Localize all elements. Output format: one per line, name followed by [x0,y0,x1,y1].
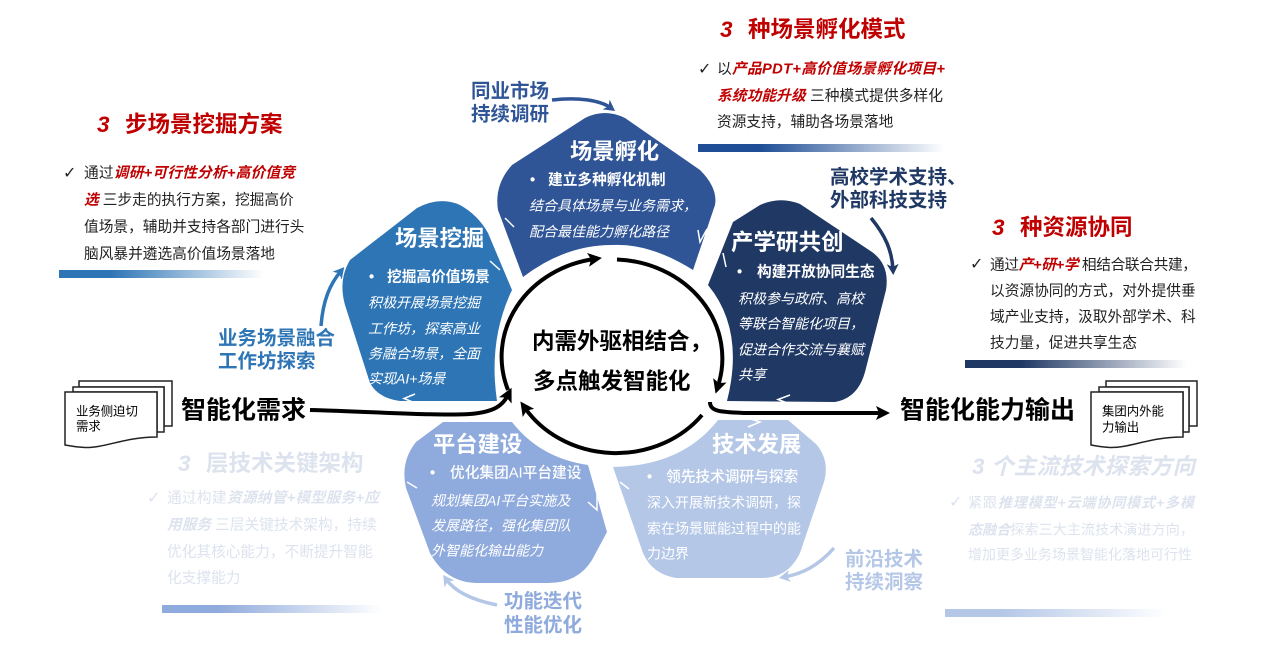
gradient bar [945,609,1167,617]
pentagon text: • [647,470,652,486]
pentagon title: 场景孵化 [570,139,659,164]
pentagon text: 实现AI+场景 [368,370,446,386]
pentagon text: 索在场景赋能过程中的能 [647,520,801,536]
pentagon text: • [530,172,535,188]
text block: incubation modes: 资源支持，辅助各场景落地 [717,114,894,130]
pentagon text: • [430,466,435,482]
pentagon text: • [369,270,374,286]
gradient bar [965,360,1187,368]
callout: 业务场景融合: 业务场景融合 [218,328,336,350]
heading: 3 种资源协同: 种资源协同 [1020,215,1133,240]
pentagon: 技术发展 [613,420,826,578]
heading: 3 种场景孵化模式: 3 [720,17,733,42]
icon: document stack right [1091,381,1197,448]
text block: 用服务 三层关键技术架构，持续 [167,516,377,534]
text block: mining plan: 脑风暴并遴选高价值场景落地 [84,246,275,262]
text block: 化支撑能力 [167,570,240,586]
text block: 态融合探索三大主流技术演进方向， [968,522,1194,538]
arrow [784,548,834,577]
callout: 功能迭代: 性能优化 [504,614,582,636]
text block: mining plan: 选 三步走的执行方案，挖掘高价 [84,190,294,208]
text block: 紧跟推理模型+云端协同模式+多模 [968,494,1197,510]
arrow [552,99,611,108]
text block: 增加更多业务场景智能化落地可行性 [968,546,1192,562]
pentagon text: 工作坊，探索高业 [368,320,481,336]
text block: resource synergy: 以资源协同的方式，对外提供垂 [990,282,1196,300]
pentagon text: 促进合作交流与襄赋 [738,342,866,358]
pentagon text: 结合具体场景与业务需求， [529,198,697,214]
label: 智能化能力输出: 智能化能力输出 [900,396,1075,424]
pentagon text [529,170,697,240]
callout: 同业市场持续调研 [471,80,611,126]
text block: incubation modes [717,60,945,130]
pentagon title: 平台建设 [433,431,522,457]
gradient bar [59,270,264,278]
text block: resource synergy: 技力量，促进共享生态 [990,334,1137,352]
callout: 高校学术支持: 高校学术支持、 [830,166,967,188]
pentagon text: 发展路径，强化集团队 [431,518,571,534]
panel: 3 种场景孵化模式 [698,17,945,152]
panel: 3 层技术关键架构 (faded) [147,451,382,613]
heading: 3 步场景挖掘方案: 3 [97,112,110,137]
pentagon text: 构建开放协同生态 [757,262,875,280]
heading: 3 种场景孵化模式: 种场景孵化模式 [748,17,906,42]
center text [532,329,712,394]
text block: 通过构建资源纳管+模型服务+应 [167,490,381,506]
text block: mining plan: 值场景，辅助并支持各部门进行头 [84,218,304,236]
text block [968,494,1197,562]
pentagon text: 规划集团AI平台实施及 [431,492,571,508]
document text [1102,404,1164,434]
callout: 高校学术支持 [830,166,967,270]
pentagon text [647,468,801,562]
callout: 业务场景融合: 工作坊探索 [218,350,316,372]
icon: check: ✓ [147,488,160,507]
callout: 前沿技术 [784,548,924,594]
pentagon text: 外智能化输出能力 [431,542,544,558]
callout: 同业市场持续调研: 持续调研 [471,104,549,126]
pentagon text: 等联合智能化项目， [738,316,864,332]
callout: 前沿技术: 前沿技术 [845,548,924,570]
icon: check: ✓ [970,254,983,273]
small white chevrons on pentagon edges [404,218,790,510]
arrow [871,218,893,270]
pentagon text [430,464,582,558]
heading: 3 步场景挖掘方案: 步场景挖掘方案 [125,111,283,137]
pentagon text: 积极参与政府、高校 [738,290,866,306]
document text: 力输出 [1102,420,1139,434]
arrow [446,579,497,605]
icon: check: ✓ [949,492,962,511]
pentagon title: 技术发展 [712,432,801,457]
icon: check: ✓ [698,59,711,78]
text block: resource synergy: 通过产+研+学 相结合联合共建， [990,256,1197,274]
pentagon: 平台建设 [404,422,607,583]
text block: resource synergy [990,256,1197,352]
arrow [321,271,341,326]
input arrow: 智能化需求 [310,395,508,415]
center text: 内需外驱相结合， [532,329,712,354]
pentagon text [368,268,490,386]
text block: resource synergy: 域产业支持，汲取外部学术、科 [990,308,1196,326]
gradient bar [162,605,382,613]
pentagon text: 建立多种孵化机制 [548,170,666,188]
heading: 3 个主流技术探索方向 [972,454,1197,479]
pentagon text: • [737,264,742,280]
callout: 前沿技术: 持续洞察 [845,572,924,594]
pentagon: 产学研共创 [708,200,887,402]
text block: incubation modes: 系统功能升级 三种模式提供多样化 [717,88,943,104]
center cycle arrows [502,259,722,453]
pentagon: 场景孵化 [497,113,715,277]
gradient bar [698,144,945,152]
icon: check: ✓ [63,163,76,182]
document text [76,404,138,434]
heading: 3 [178,451,191,476]
pentagon text: 优化集团AI平台建设 [450,464,582,482]
pentagon title: 场景挖掘 [395,226,484,251]
heading: 3 种资源协同: 3 [992,215,1005,240]
callout: 业务场景融合 [218,271,341,372]
pentagon text: 配合最佳能力孵化路径 [529,224,671,240]
pentagon text [737,262,875,382]
pentagon text: 深入开展新技术调研，探 [647,494,801,510]
callout: 高校学术支持: 外部科技支持 [830,188,947,212]
pentagon title: 产学研共创 [731,230,844,255]
pentagon text: 领先技术调研与探索 [666,468,798,486]
heading: 层技术关键架构 [206,451,364,476]
document text: 集团内外能 [1102,404,1164,418]
callout: 同业市场持续调研: 同业市场 [471,80,549,102]
text block: 优化其核心能力，不断提升智能 [167,542,373,560]
pentagon text: 力边界 [647,546,689,562]
text block: incubation modes: 以产品PDT+高价值场景孵化项目+ [717,60,945,78]
pentagon text: 共享 [738,366,768,382]
callout: 功能迭代 [446,579,583,636]
panel: 3 个主流技术探索方向 (faded) [945,454,1197,617]
icon: document stack left [65,381,172,448]
output arrow: 智能化能力输出 [710,402,882,413]
pentagon text: 务融合场景，全面 [368,346,482,362]
text block: mining plan [84,164,304,262]
pentagon text: 积极开展场景挖掘 [368,294,482,310]
pentagon text: 挖掘高价值场景 [387,268,490,286]
panel: 3 步场景挖掘方案 [59,111,304,278]
panel: 3 种资源协同 [965,215,1197,368]
pentagon: 场景挖掘 [342,201,512,401]
center text: 多点触发智能化 [533,369,691,394]
document text: 需求 [76,420,101,434]
label: 智能化需求: 智能化需求 [181,396,306,424]
text block: mining plan: 通过调研+可行性分析+高价值竞 [84,164,297,182]
callout: 功能迭代: 功能迭代 [504,590,583,612]
text block [167,490,381,586]
document text: 业务侧迫切 [76,404,138,418]
